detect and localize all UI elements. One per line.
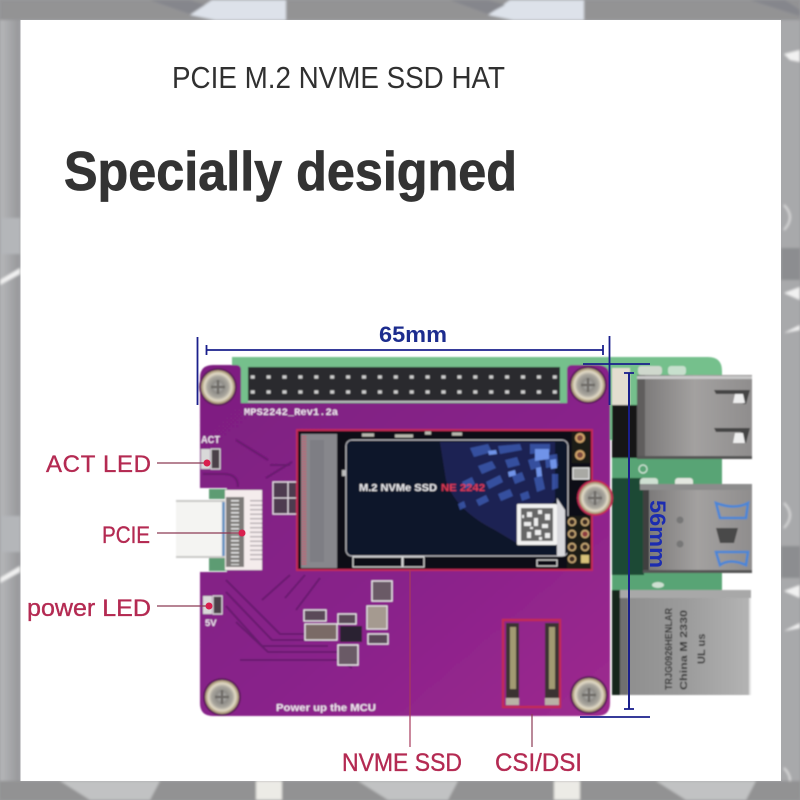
callout: CSI/DSI (495, 714, 582, 777)
silkscreen: ACT: ACT (201, 435, 220, 446)
ethernet port with markings: UL us (696, 634, 708, 664)
callout: CSI/DSI: CSI/DSI (495, 749, 582, 777)
callout: power LED (27, 595, 212, 622)
ethernet port with markings: TRJG0926HENLAR (664, 607, 675, 690)
callout: power LED: power LED (27, 595, 151, 622)
dimension: 65mm width: 65mm (379, 322, 447, 347)
callout: NVME SSD: NVME SSD (342, 749, 462, 777)
circuit traces (203, 440, 352, 668)
power section components (304, 581, 392, 665)
silkscreen: 5V: 5V (205, 618, 217, 629)
green Raspberry Pi board (232, 357, 722, 590)
callout: PCIE: PCIE (102, 522, 150, 549)
silkscreen: board revision: MPS2242_Rev1.2a (244, 408, 338, 419)
heading: Specially designed: Specially designed (64, 140, 517, 202)
callout: ACT LED (46, 451, 210, 478)
SSD PCB markings (353, 557, 403, 567)
M.2 SSD module with frame: NE 2242 (441, 482, 485, 494)
FPC ribbon cable (176, 489, 229, 571)
USB port upper (637, 375, 752, 459)
M.2 SSD module with frame (297, 430, 592, 570)
mounting screws (199, 366, 613, 716)
gold pads upper (572, 432, 590, 479)
callout: ACT LED: ACT LED (46, 451, 151, 478)
purple HAT PCB (200, 365, 610, 716)
QR code (517, 504, 557, 545)
power LED component (203, 596, 222, 614)
SSD label texture (458, 444, 558, 510)
gold pads lower (567, 516, 591, 569)
ACT LED component (201, 449, 220, 469)
title: product name: PCIE M.2 NVME SSD HAT (172, 60, 505, 95)
ethernet port with markings: China M 2330 (679, 609, 690, 690)
USB port lower (640, 484, 752, 573)
silkscreen: Power up the MCU: Power up the MCU (276, 702, 376, 714)
CSI/DSI connectors with frame (503, 620, 560, 707)
SSD label text: M.2 NVMe SSD (359, 482, 437, 494)
dimension: 56mm height: 56mm (645, 500, 670, 568)
GPIO pin header (243, 360, 565, 403)
FPC connector (225, 490, 262, 570)
product photo: Raspberry Pi with HAT (176, 357, 752, 716)
callout: PCIE (102, 522, 246, 549)
SSD label (346, 440, 568, 556)
small pads beside FPC (273, 482, 303, 514)
ethernet port with markings (620, 590, 751, 695)
